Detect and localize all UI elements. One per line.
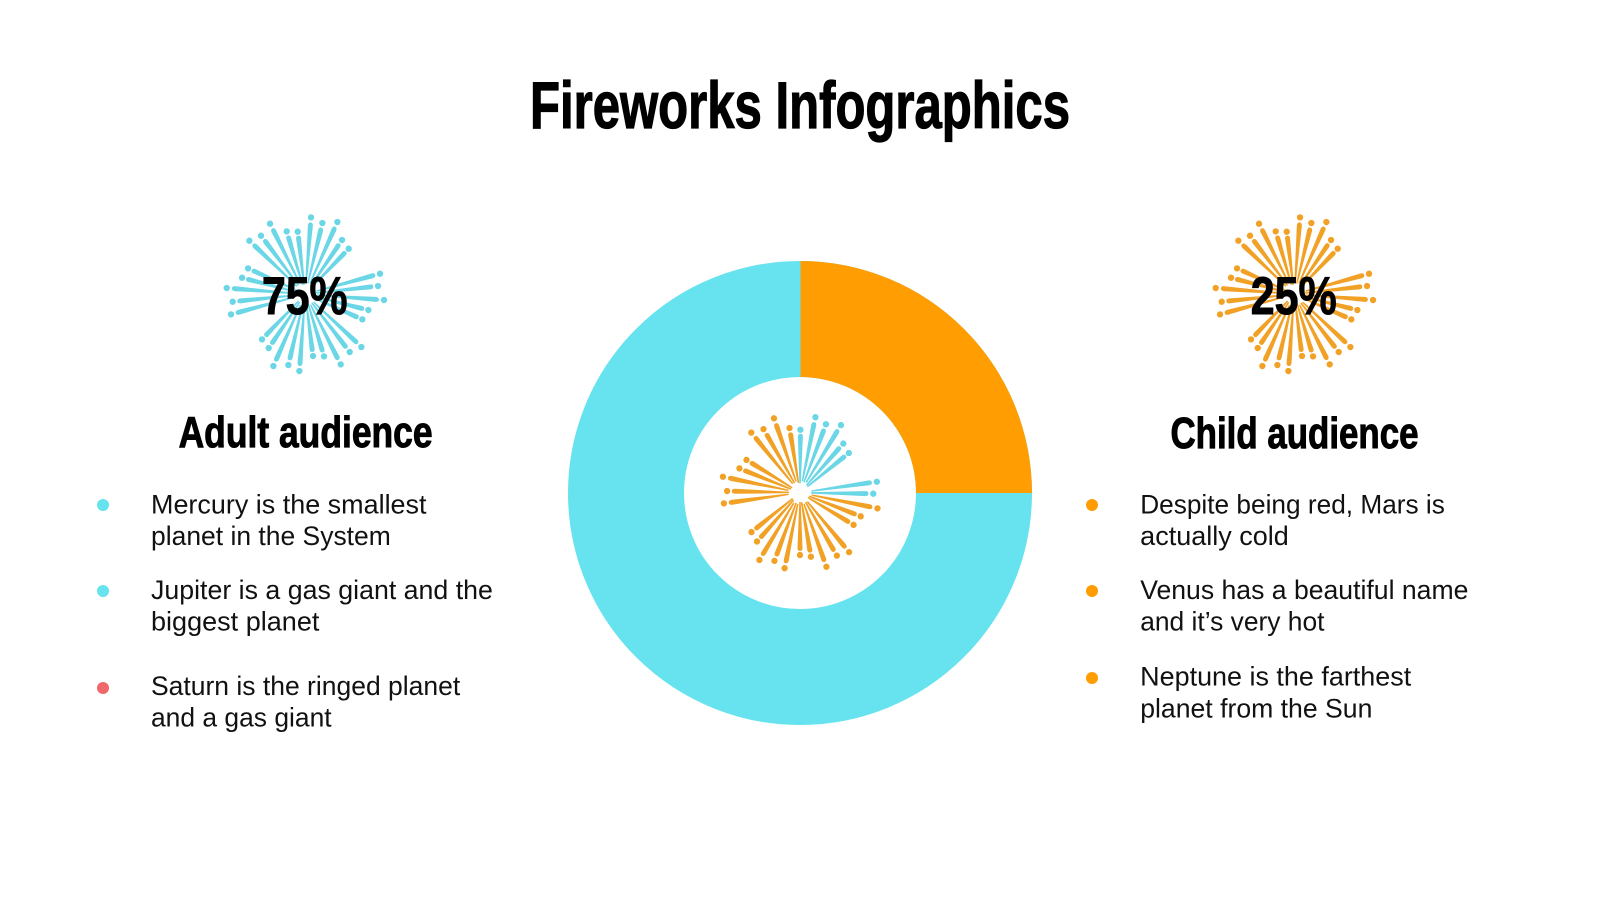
list item: Saturn: Saturn is the ringed planet — [151, 671, 461, 701]
title: Fireworks Infographics — [530, 68, 1070, 142]
icon: blue firework with 75%: 75% — [262, 267, 348, 326]
list item: Venus: and it’s very hot — [1140, 607, 1325, 637]
list item: Neptune — [1086, 662, 1412, 723]
heading: adult audience: Adult audience — [179, 408, 433, 457]
list item: Saturn: and a gas giant — [151, 702, 332, 732]
list item: Venus — [1086, 575, 1468, 637]
list item: Mercury — [97, 489, 427, 551]
list item: Saturn — [97, 671, 461, 732]
heading: child audience: Child audience — [1170, 409, 1418, 458]
icon: centre firework — [709, 403, 891, 582]
list item: Mercury: Mercury is the smallest — [151, 489, 427, 519]
list item: Jupiter: Jupiter is a gas giant and the — [151, 575, 493, 605]
list item: Neptune: planet from the Sun — [1140, 693, 1372, 723]
list item: Neptune: Neptune is the farthest — [1140, 662, 1412, 692]
icon: orange firework with 25%: 25% — [1251, 267, 1337, 326]
panel: adult audience — [97, 214, 493, 732]
icon: blue firework with 75% — [224, 214, 387, 374]
list item: Mercury: planet in the System — [151, 521, 391, 551]
icon: orange firework with 25% — [1213, 214, 1376, 374]
list item: Jupiter: biggest planet — [151, 607, 320, 637]
list item: Jupiter — [97, 575, 493, 637]
list item: Venus: Venus has a beautiful name — [1140, 575, 1468, 605]
list item: Mars — [1086, 489, 1445, 551]
donut chart: 75% adult, 25% child — [626, 261, 1032, 667]
panel: child audience — [1086, 214, 1468, 723]
list item: Mars: Despite being red, Mars is — [1140, 489, 1445, 519]
list item: Mars: actually cold — [1140, 521, 1289, 551]
